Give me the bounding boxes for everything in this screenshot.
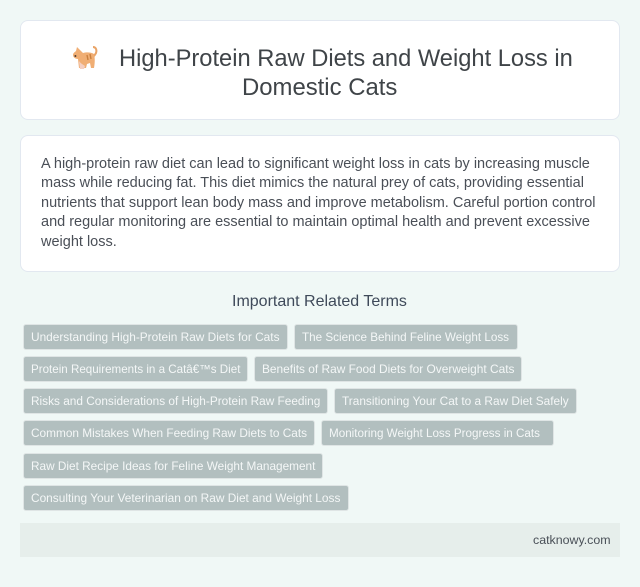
heading: title line 1: High-Protein Raw Diets and Weight Loss in: [119, 46, 573, 72]
text: description: A high-protein raw diet can lead to significant weight loss in cats by increasing muscle: [41, 156, 590, 172]
text: description: nutrients that support lean body mass and improve metabolism. Careful portion control: [41, 195, 596, 211]
tag list: Protein Requirements in a Catâ€™s Diet: [31, 363, 240, 376]
tag list: Common Mistakes When Feeding Raw Diets to Cats: [31, 426, 307, 440]
text: description: [41, 156, 596, 250]
heading: title line 2: Domestic Cats: [242, 74, 397, 101]
tag list: Benefits of Raw Food Diets for Overweight Cats: [262, 362, 514, 376]
panel: title card: [20, 20, 620, 120]
text: description: mass while reducing fat. This diet mimics the natural prey of cats, providing essential: [41, 175, 584, 191]
tag list: Monitoring Weight Loss Progress in Cats: [329, 427, 540, 440]
tag list: The Science Behind Feline Weight Loss: [302, 331, 509, 344]
tag list: Consulting Your Veterinarian on Raw Diet and Weight Loss: [31, 491, 340, 505]
footer bar: [20, 523, 620, 557]
panel: description card: [20, 135, 620, 272]
heading: related terms: Important Related Terms: [232, 293, 407, 310]
tag list: Transitioning Your Cat to a Raw Diet Safely: [342, 394, 569, 408]
tag list: Raw Diet Recipe Ideas for Feline Weight Management: [31, 459, 315, 473]
tag list: Understanding High-Protein Raw Diets for Cats: [31, 330, 280, 344]
text: description: weight loss.: [41, 234, 117, 250]
tag list: Risks and Considerations of High-Protein Raw Feeding: [31, 394, 320, 408]
footer: source: catknowy.com: [533, 533, 611, 547]
tag list: [23, 324, 577, 511]
icon: cat: [73, 46, 98, 69]
text: description: and regular monitoring are essential to maintain optimal health and prevent excessive: [41, 214, 590, 230]
